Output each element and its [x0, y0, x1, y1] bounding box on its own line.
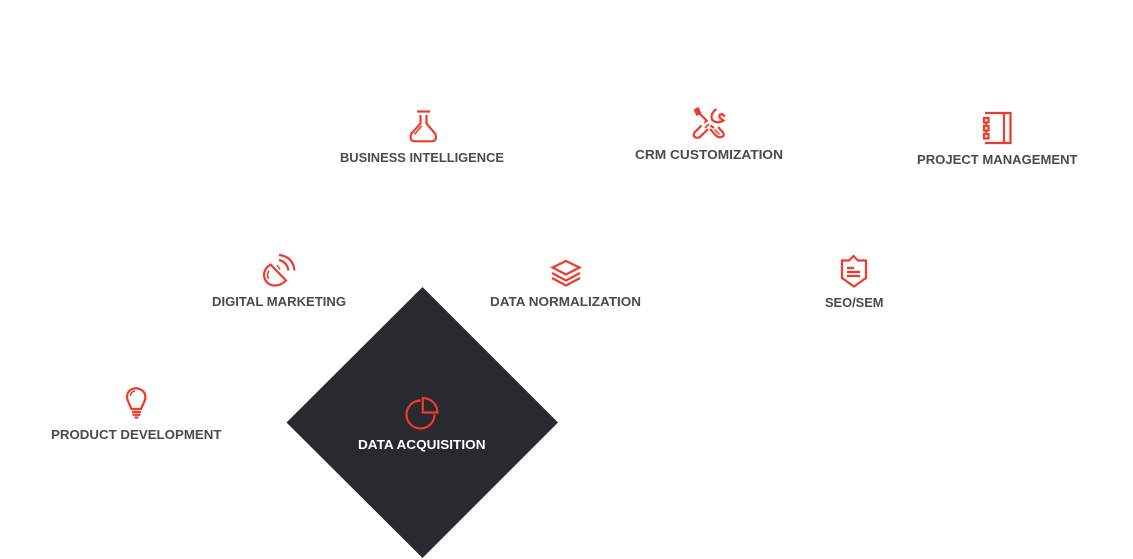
- label: data normalization: DATA NORMALIZATION: [490, 294, 641, 309]
- central dark diamond: [286, 287, 558, 558]
- item: crm customization: [635, 108, 783, 162]
- label: digital marketing: DIGITAL MARKETING: [212, 294, 346, 309]
- icon: stacked layers: [552, 261, 580, 286]
- item: data normalization: [490, 261, 641, 309]
- icon: pie chart: [406, 398, 438, 428]
- icon: satellite dish: [264, 255, 294, 286]
- item: seo/sem: [825, 256, 884, 310]
- item: product development: [51, 388, 222, 442]
- label: seo/sem: SEO/SEM: [825, 295, 884, 310]
- icon: light bulb: [127, 388, 145, 418]
- item: data acquisition: [358, 398, 486, 452]
- icon: flask: [411, 112, 436, 141]
- icon: notebook: [984, 113, 1010, 143]
- item: business intelligence: [340, 112, 504, 165]
- icon: wrench and screwdriver: [694, 108, 725, 138]
- label: product development: PRODUCT DEVELOPMENT: [51, 427, 222, 442]
- label: crm customization: CRM CUSTOMIZATION: [635, 147, 783, 162]
- label: project management: PROJECT MANAGEMENT: [917, 152, 1078, 167]
- label: data acquisition: DATA ACQUISITION: [358, 437, 486, 452]
- icon: shield with lines: [842, 256, 866, 286]
- item: digital marketing: [212, 255, 346, 309]
- item: project management: [917, 113, 1078, 167]
- label: business intelligence: BUSINESS INTELLIGENCE: [340, 150, 504, 165]
